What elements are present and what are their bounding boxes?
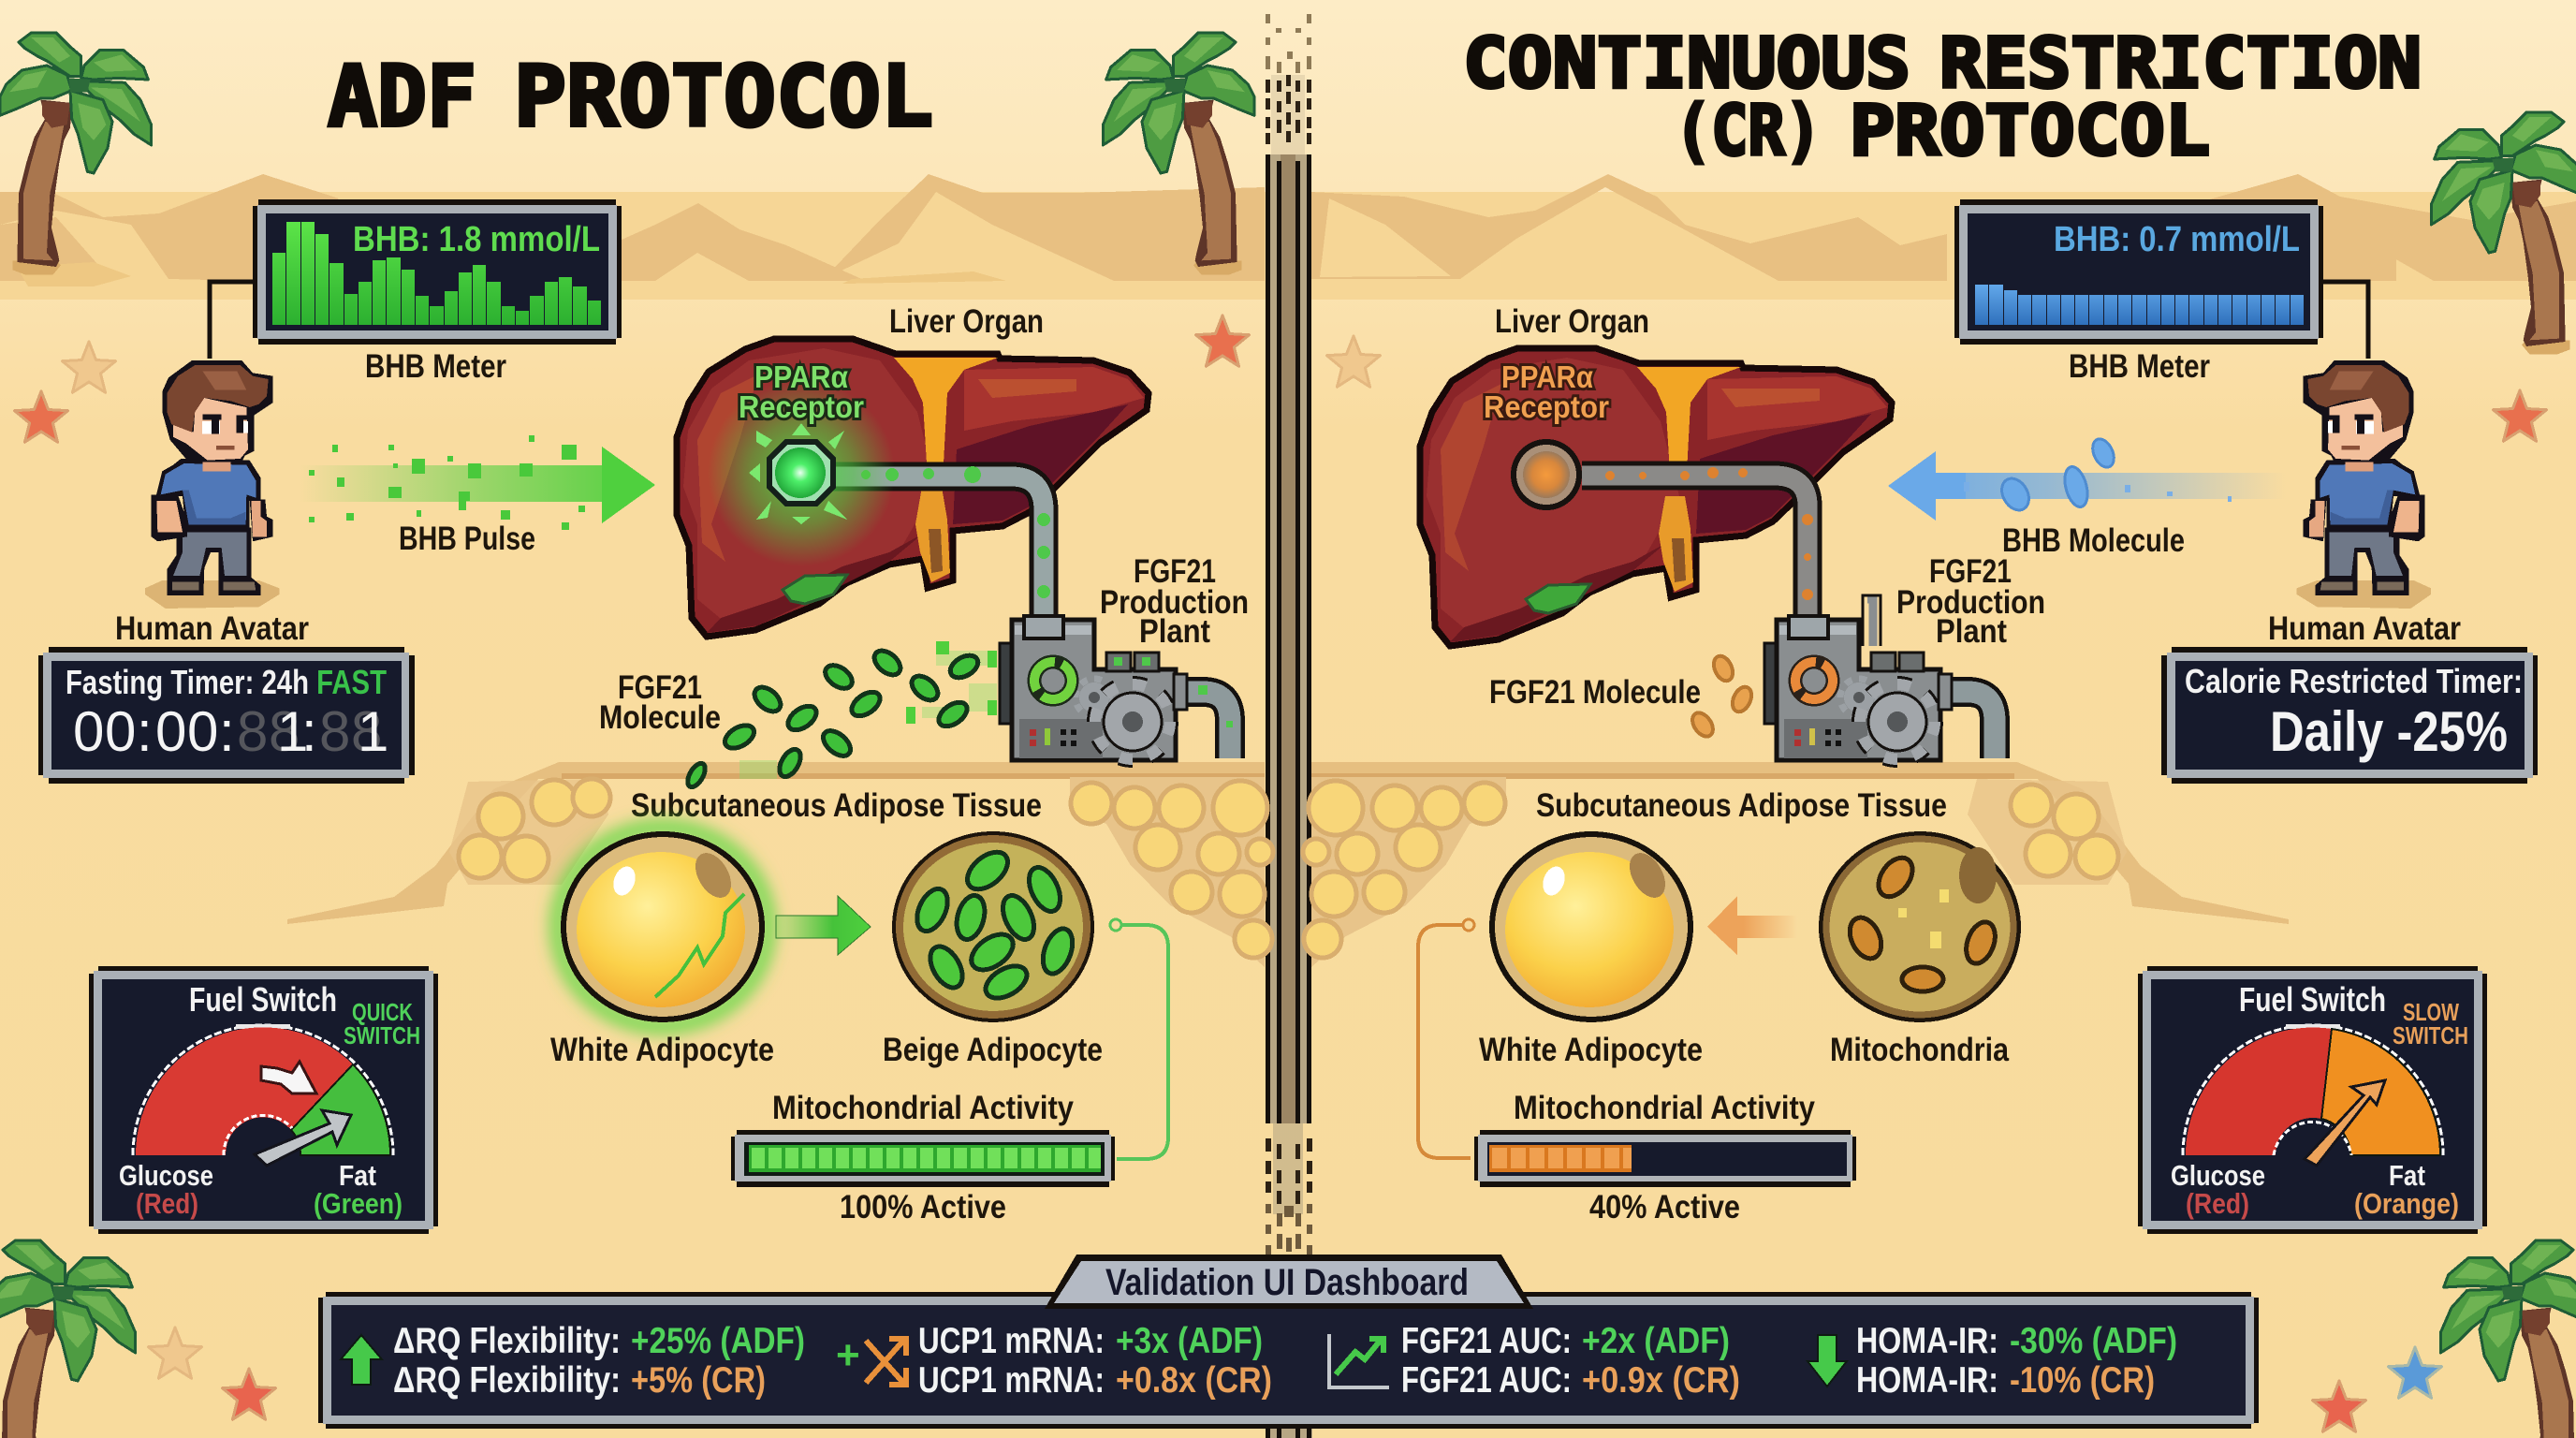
- fuel switch gauge ADF: Fat: [339, 1159, 376, 1192]
- fuel switch gauge CR: (Orange): [2354, 1187, 2459, 1220]
- fuel switch gauge CR: Fuel Switch: [2239, 980, 2386, 1019]
- palm tree: left panel right: [1103, 33, 1254, 274]
- title: continuous restriction protocol: [1463, 23, 2422, 171]
- metric: HOMA-IR: HOMA-IR:: [1856, 1360, 1998, 1401]
- label: liver organ right: Liver Organ: [1495, 303, 1649, 340]
- label: FGF21 molecule left: FGF21: [618, 669, 702, 706]
- metric: RQ flexibility: +5% (CR): [631, 1360, 766, 1401]
- metric: HOMA-IR: HOMA-IR:: [1856, 1321, 1998, 1361]
- fasting timer panel: [38, 647, 415, 784]
- label: BHB pulse: BHB Pulse: [399, 521, 535, 557]
- title: continuous restriction protocol: (CR): [1675, 91, 1822, 171]
- flat bars: [1975, 285, 2304, 325]
- metric: UCP1 mRNA: UCP1 mRNA:: [918, 1360, 1105, 1401]
- palm tree: top right: [2431, 112, 2576, 354]
- fuel switch gauge ADF: SWITCH: [344, 1021, 420, 1049]
- receptor glow: [708, 379, 895, 566]
- timer digits: 8888: [237, 700, 382, 763]
- mitochondria to white arrow: [1707, 896, 1797, 955]
- PPAR receptor label right: PPARα: [1501, 360, 1593, 394]
- label: FGF21 molecule left: Molecule: [599, 699, 721, 736]
- fuel switch gauge ADF: [89, 966, 438, 1234]
- label: BHB meter left: BHB Meter: [365, 348, 506, 385]
- label: human avatar left: Human Avatar: [115, 610, 309, 647]
- skin layer and adipose clusters: right: [1303, 762, 2289, 967]
- white adipocyte right: [1492, 834, 1690, 1020]
- gauge needle: [2305, 1080, 2385, 1166]
- label: FGF21 production plant right: Plant: [1936, 613, 2007, 650]
- title: continuous restriction protocol: RESTRICTION: [1939, 23, 2422, 104]
- label: FGF21 production plant right: Production: [1896, 584, 2045, 621]
- timer digits: :::: [137, 700, 317, 763]
- calorie restricted timer panel: Calorie Restricted Timer:: [2185, 662, 2523, 700]
- fuel switch gauge CR: (Red): [2186, 1187, 2249, 1220]
- connector line: [1418, 925, 1471, 1158]
- metric: UCP1 mRNA: +0.8x (CR): [1116, 1360, 1272, 1401]
- label: mitochondria: Mitochondria: [1830, 1032, 2009, 1068]
- BHB meter left: BHB: 1.8 mmol/L: [353, 220, 600, 259]
- label: BHB molecule: BHB Molecule: [2002, 522, 2185, 559]
- fuel switch gauge CR: Glucose: [2171, 1159, 2265, 1192]
- mitochondrial activity bar ADF: Mitochondrial Activity: [772, 1090, 1074, 1126]
- receptor inactive: [1514, 442, 1579, 507]
- liver organ left: [677, 339, 1149, 637]
- palm tree: top left: [0, 33, 152, 274]
- metric: HOMA-IR: -30% (ADF): [2010, 1321, 2177, 1361]
- metric: FGF21 AUC: FGF21 AUC:: [1401, 1360, 1572, 1401]
- metric: FGF21 AUC: [1329, 1321, 1740, 1401]
- human avatar left: [145, 360, 279, 609]
- starfish decorations: [15, 315, 2546, 1431]
- timer digits: [73, 700, 388, 763]
- label: FGF21 production plant right: [1896, 553, 2045, 650]
- PPAR receptor label left: PPARα: [754, 360, 848, 394]
- gauge needle: [255, 1110, 351, 1166]
- human avatar right: [2297, 360, 2431, 609]
- label: BHB meter right: BHB Meter: [2069, 348, 2210, 385]
- fuel switch gauge ADF: (Red): [136, 1187, 198, 1220]
- BHB molecule arrow: [1888, 435, 2286, 521]
- gauge dial: [133, 1024, 393, 1155]
- beige adipocyte: [895, 834, 1091, 1020]
- palm tree: bottom right: [2440, 1240, 2576, 1438]
- metric: UCP1 mRNA: +3x (ADF): [1116, 1321, 1263, 1361]
- PPAR receptor label right: Receptor: [1484, 389, 1609, 424]
- white curved arrow: [261, 1062, 316, 1093]
- mitochondrial activity bar CR: 40% Active: [1589, 1189, 1740, 1225]
- title: ADF protocol: ADF: [328, 48, 476, 146]
- mitochondria cell: [1822, 834, 2018, 1020]
- calorie restricted timer panel: Daily -25%: [2270, 700, 2508, 763]
- plant left with pipe: [677, 339, 1233, 763]
- label: FGF21 production plant left: FGF21: [1134, 553, 1216, 590]
- calorie restricted timer panel: [2161, 647, 2538, 784]
- mitochondrial activity bar ADF: 100% Active: [840, 1189, 1006, 1225]
- title: continuous restriction protocol: PROTOCOL: [1850, 91, 2210, 171]
- fuel switch gauge ADF: Glucose: [119, 1159, 213, 1192]
- label: FGF21 production plant left: [1100, 553, 1249, 650]
- metric: FGF21 AUC: +0.9x (CR): [1582, 1360, 1740, 1401]
- mitochondrial activity bar CR: [1418, 919, 1856, 1225]
- fuel switch gauge CR: SWITCH: [2393, 1021, 2468, 1049]
- label: FGF21 production plant right: FGF21: [1929, 553, 2012, 590]
- PPAR receptor label left: Receptor: [739, 389, 864, 424]
- fuel switch gauge CR: Fat: [2389, 1159, 2425, 1192]
- BHB meter right: [1954, 199, 2368, 359]
- PPAR receptor label right: [1484, 360, 1609, 424]
- title: continuous restriction protocol: CONTINUOUS: [1463, 23, 1910, 104]
- label: FGF21 production plant left: Production: [1100, 584, 1249, 621]
- central divider: [1266, 14, 1312, 1438]
- FGF21 molecules left: [684, 641, 997, 790]
- metric: FGF21 AUC: FGF21 AUC:: [1401, 1321, 1572, 1361]
- FGF21 molecules right: [1689, 653, 1755, 741]
- mitochondrial activity bar ADF: [731, 919, 1168, 1225]
- metric: RQ flexibility: [341, 1321, 805, 1401]
- dashboard tab: Validation UI Dashboard: [1105, 1262, 1469, 1303]
- BHB meter left: [210, 199, 622, 359]
- metric: UCP1 mRNA: UCP1 mRNA:: [918, 1321, 1105, 1361]
- BHB pulse arrow: [300, 435, 655, 530]
- title: ADF protocol: PROTOCOL: [514, 48, 933, 146]
- PPAR receptor label left: [739, 360, 864, 424]
- plant body right: [1764, 616, 1995, 763]
- label: FGF21 molecule left: [599, 669, 721, 736]
- label: subcutaneous adipose tissue right: Subcutaneous Adipose Tissue: [1536, 787, 1947, 824]
- plant right with pipe: [1420, 348, 1995, 763]
- title: ADF protocol: [328, 48, 933, 146]
- label: white adipocyte left: White Adipocyte: [550, 1032, 774, 1068]
- metric: UCP1 mRNA: [836, 1321, 1272, 1401]
- metric: FGF21 AUC: +2x (ADF): [1582, 1321, 1730, 1361]
- timer digits: 11: [277, 700, 388, 763]
- metric: HOMA-IR: -10% (CR): [2010, 1360, 2155, 1401]
- fasting timer panel: Fasting Timer: 24h FAST: [66, 663, 387, 701]
- metric: UCP1 mRNA: +: [836, 1332, 860, 1378]
- label: beige adipocyte: Beige Adipocyte: [883, 1032, 1103, 1068]
- label: FGF21 production plant left: Plant: [1139, 613, 1210, 650]
- connector line: [1117, 925, 1168, 1159]
- fuel switch gauge CR: SLOW: [2403, 998, 2459, 1026]
- timer digits: 0000: [73, 700, 218, 763]
- fuel switch gauge CR: [2138, 966, 2487, 1234]
- label: liver organ left: Liver Organ: [889, 303, 1044, 340]
- metric: HOMA-IR: [1808, 1321, 2177, 1401]
- palm tree: bottom left: [0, 1240, 136, 1438]
- dashboard tab: [1045, 1255, 1533, 1309]
- label: subcutaneous adipose tissue left: Subcutaneous Adipose Tissue: [631, 787, 1042, 824]
- metric: RQ flexibility: +25% (ADF): [631, 1321, 805, 1361]
- plant body left: [1000, 616, 1230, 763]
- white to beige arrow: [776, 896, 871, 955]
- mitochondrial activity bar CR: Mitochondrial Activity: [1514, 1090, 1815, 1126]
- BHB meter right: BHB: 0.7 mmol/L: [2054, 220, 2300, 259]
- gauge dial: [2183, 1024, 2443, 1155]
- white adipocyte left: [558, 828, 768, 1026]
- label: FGF21 molecule right: FGF21 Molecule: [1489, 674, 1701, 711]
- skin layer and adipose clusters: left: [287, 762, 1273, 967]
- waveform bars: [272, 222, 601, 325]
- fuel switch gauge ADF: QUICK: [352, 998, 413, 1026]
- label: white adipocyte right: White Adipocyte: [1479, 1032, 1703, 1068]
- fuel switch gauge ADF: Fuel Switch: [189, 980, 337, 1019]
- metric: RQ flexibility: ΔRQ Flexibility:: [393, 1321, 621, 1361]
- validation dashboard: [318, 1255, 2259, 1429]
- metric: RQ flexibility: ΔRQ Flexibility:: [393, 1360, 621, 1401]
- fuel switch gauge ADF: (Green): [314, 1187, 402, 1220]
- label: human avatar right: Human Avatar: [2268, 610, 2461, 647]
- liver organ right: [1420, 348, 1892, 646]
